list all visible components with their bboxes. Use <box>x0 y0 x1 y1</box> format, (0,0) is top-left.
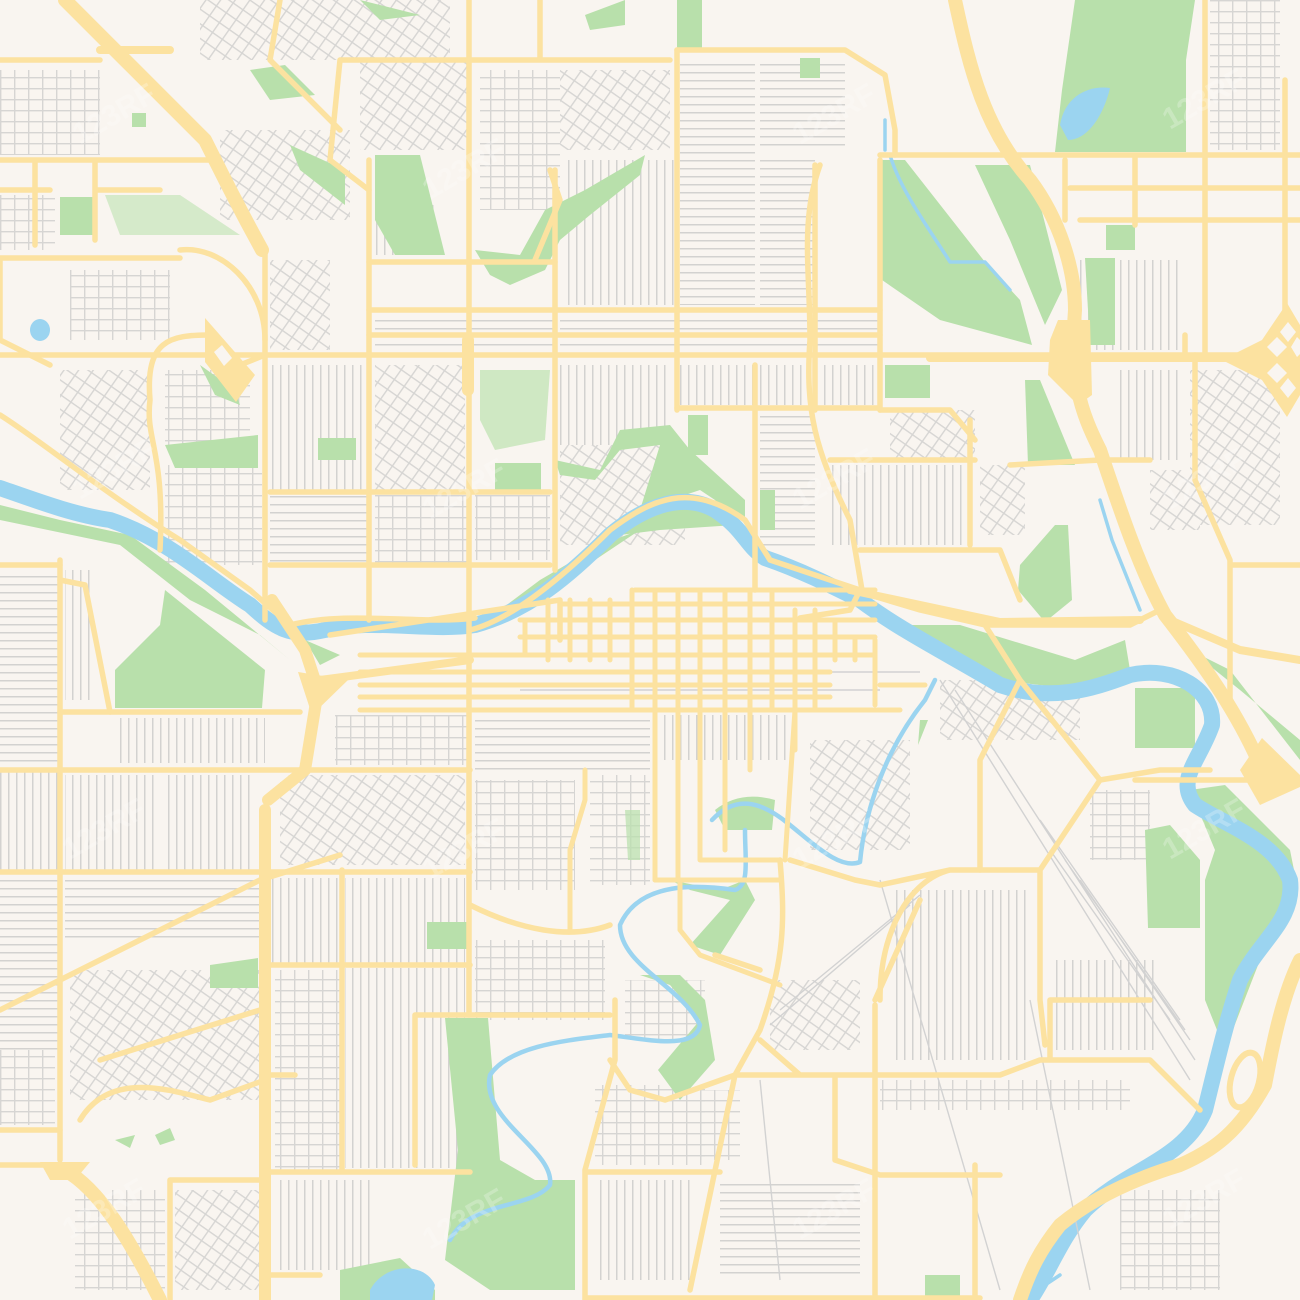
watermarks: 123RF <box>1157 62 1251 136</box>
watermarks: 123RF <box>1157 792 1251 866</box>
interchange: east <box>1222 303 1300 417</box>
watermarks: 123RF <box>57 1172 151 1246</box>
watermarks: 123RF <box>57 792 151 866</box>
interchange: south-east <box>1240 738 1300 805</box>
railway <box>375 672 1195 1290</box>
southern arterials <box>0 580 1200 1300</box>
watermarks: 123RF <box>417 1182 511 1256</box>
interchange: city west <box>40 1162 90 1180</box>
river: main channel <box>0 488 1290 1300</box>
lakes <box>30 87 1110 1300</box>
interchange: south-west <box>298 672 348 715</box>
watermarks: 123RF <box>417 812 511 886</box>
watermarks: 123RF <box>787 77 881 151</box>
watermarks: 123RF <box>67 77 161 151</box>
loop ramp <box>1224 1049 1266 1111</box>
watermarks: 123RF <box>787 802 881 876</box>
watermarks: 123RF <box>1157 442 1251 516</box>
creeks <box>885 120 1140 1295</box>
watermarks: 123RF <box>1157 1162 1251 1236</box>
elbow river <box>450 680 935 1240</box>
interchange holes <box>214 322 1300 398</box>
watermarks: 123RF <box>787 1172 881 1246</box>
downtown grid <box>360 590 925 985</box>
watermarks: 123RF <box>787 442 881 516</box>
interchange: north-south freeway <box>1048 320 1092 405</box>
watermarks: 123RF <box>417 132 511 206</box>
interchange: west <box>205 318 255 402</box>
watermarks: 123RF <box>417 452 511 526</box>
watermarks: 123RF <box>67 432 161 506</box>
